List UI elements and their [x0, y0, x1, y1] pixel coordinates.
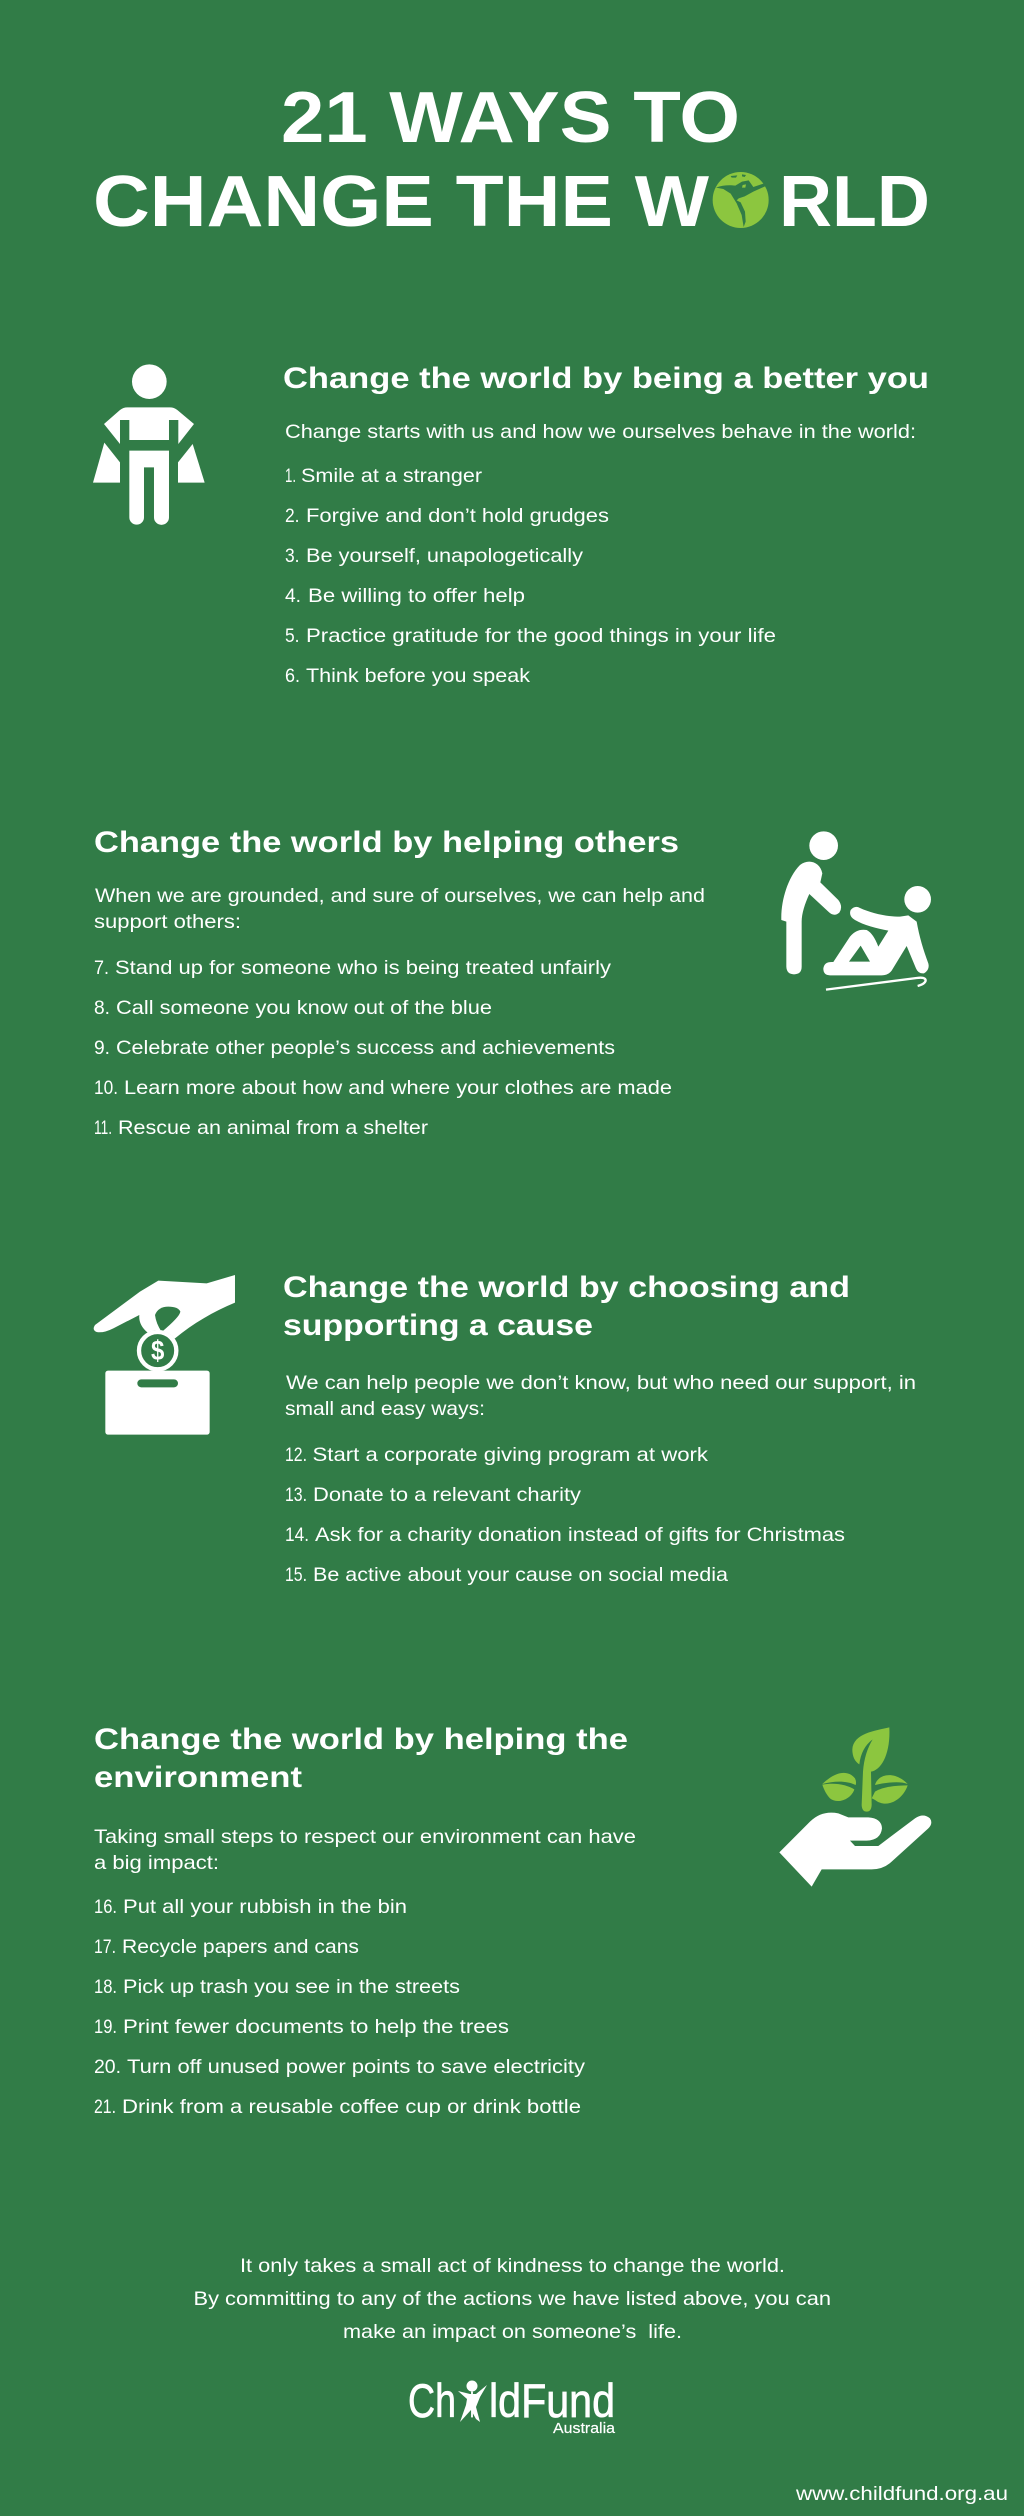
list: items 1 to 6: 3. — [285, 545, 300, 567]
list: items 7 to 11: 9. — [94, 1037, 110, 1059]
list: items 7 to 11: Call someone you know out of the blue — [116, 997, 492, 1019]
list: items 16 to 21: Turn off unused power points to save electricity — [127, 2056, 585, 2078]
list: items 7 to 11: 11. — [94, 1117, 112, 1139]
intro text: When we are grounded, and sure of ourselves, we can help and — [95, 885, 705, 907]
list: items 16 to 21: Drink from a reusable coffee cup or drink bottle — [122, 2096, 581, 2118]
logo: ChildFund Australia: Australia — [553, 2420, 616, 2437]
intro text: small and easy ways: — [285, 1398, 485, 1420]
closing message: make an impact on someone’s life. — [343, 2321, 682, 2343]
list: items 16 to 21: 16. — [94, 1896, 117, 1918]
list: items 16 to 21: 19. — [94, 2016, 117, 2038]
heading — [283, 1271, 850, 1342]
closing message — [194, 2255, 831, 2343]
panel: being a better you — [93, 362, 929, 687]
intro text: Change starts with us and how we ourselves behave in the world: — [285, 421, 916, 443]
list: items 7 to 11 — [94, 957, 672, 1139]
title: RLD — [779, 162, 930, 242]
list: items 7 to 11: Stand up for someone who is being treated unfairly — [115, 957, 611, 979]
list: items 7 to 11: 10. — [94, 1077, 118, 1099]
list: items 1 to 6: 1. — [285, 465, 296, 487]
list: items 16 to 21: 21. — [94, 2096, 116, 2118]
list: items 12 to 15: 14. — [285, 1524, 309, 1546]
closing message: By committing to any of the actions we have listed above, you can — [194, 2288, 831, 2310]
title — [93, 78, 930, 242]
intro text — [94, 1826, 636, 1874]
list: items 7 to 11: 8. — [94, 997, 110, 1019]
heading: supporting a cause — [283, 1309, 593, 1342]
title: CHANGE THE W — [93, 162, 709, 242]
list: items 12 to 15: Start a corporate giving program at work — [312, 1444, 708, 1466]
list: items 7 to 11: Learn more about how and where your clothes are made — [124, 1077, 672, 1099]
intro text: a big impact: — [94, 1852, 219, 1874]
list: items 16 to 21: Print fewer documents to help the trees — [123, 2016, 509, 2038]
panel: helping the environment — [94, 1723, 931, 2118]
list: items 7 to 11: 7. — [94, 957, 109, 979]
panel: helping others — [94, 826, 931, 1139]
list: items 1 to 6: Be willing to offer help — [308, 585, 525, 607]
intro text — [285, 1372, 916, 1420]
list: items 12 to 15: Be active about your cause on social media — [313, 1564, 728, 1586]
list: items 7 to 11: Rescue an animal from a shelter — [118, 1117, 429, 1139]
list: items 16 to 21: 20. — [94, 2056, 121, 2078]
website url: www.childfund.org.au — [795, 2483, 1008, 2505]
icon: hand holding seedling — [779, 1727, 931, 1887]
list: items 12 to 15: Ask for a charity donation instead of gifts for Christmas — [315, 1524, 845, 1546]
icon: globe — [713, 172, 769, 228]
list: items 1 to 6: 2. — [285, 505, 300, 527]
title: 21 WAYS TO — [281, 78, 740, 158]
list: items 16 to 21: Pick up trash you see in the streets — [123, 1976, 460, 1998]
icon: person helping fallen person — [781, 831, 931, 990]
title: O — [715, 162, 767, 242]
list: items 12 to 15: Donate to a relevant charity — [313, 1484, 581, 1506]
list: items 1 to 6: 4. — [285, 585, 301, 607]
list: items 1 to 6: Think before you speak — [306, 665, 530, 687]
logo: ChildFund Australia: i — [470, 2374, 474, 2427]
list: items 1 to 6: 5. — [285, 625, 300, 647]
list: items 1 to 6: 6. — [285, 665, 300, 687]
icon: hand dropping coin into box: $ — [151, 1335, 164, 1366]
logo: ChildFund Australia: Ch — [408, 2374, 456, 2427]
list: items 16 to 21: Put all your rubbish in the bin — [123, 1896, 407, 1918]
logo: ChildFund Australia — [408, 2374, 616, 2437]
list: items 12 to 15: 13. — [285, 1484, 307, 1506]
icon: hand dropping coin into box — [94, 1275, 235, 1435]
list: items 7 to 11: Celebrate other people’s success and achievements — [116, 1037, 615, 1059]
intro text: Taking small steps to respect our environment can have — [94, 1826, 636, 1848]
list: items 12 to 15 — [285, 1444, 845, 1586]
list: items 1 to 6: Be yourself, unapologetically — [306, 545, 583, 567]
intro text: support others: — [94, 911, 241, 933]
list: items 1 to 6: Forgive and don’t hold grudges — [306, 505, 609, 527]
list: items 16 to 21: Recycle papers and cans — [122, 1936, 359, 1958]
closing message: It only takes a small act of kindness to change the world. — [240, 2255, 785, 2277]
heading — [94, 1723, 628, 1794]
list: items 16 to 21 — [94, 1896, 585, 2118]
list: items 1 to 6: Smile at a stranger — [301, 465, 483, 487]
heading: Change the world by being a better you — [283, 362, 929, 395]
icon: caped person — [93, 364, 205, 525]
list: items 16 to 21: 17. — [94, 1936, 116, 1958]
list: items 1 to 6: Practice gratitude for the good things in your life — [306, 625, 776, 647]
heading: Change the world by helping others — [94, 826, 679, 859]
heading: environment — [94, 1761, 302, 1794]
heading: Change the world by helping the — [94, 1723, 628, 1756]
logo: ChildFund Australia: ldFund — [489, 2374, 615, 2427]
list: items 1 to 6 — [285, 465, 776, 687]
list: items 12 to 15: 12. — [285, 1444, 307, 1466]
intro text: We can help people we don’t know, but who need our support, in — [286, 1372, 916, 1394]
list: items 16 to 21: 18. — [94, 1976, 117, 1998]
intro text — [94, 885, 705, 933]
list: items 12 to 15: 15. — [285, 1564, 307, 1586]
panel: supporting a cause — [94, 1271, 916, 1586]
heading: Change the world by choosing and — [283, 1271, 850, 1304]
